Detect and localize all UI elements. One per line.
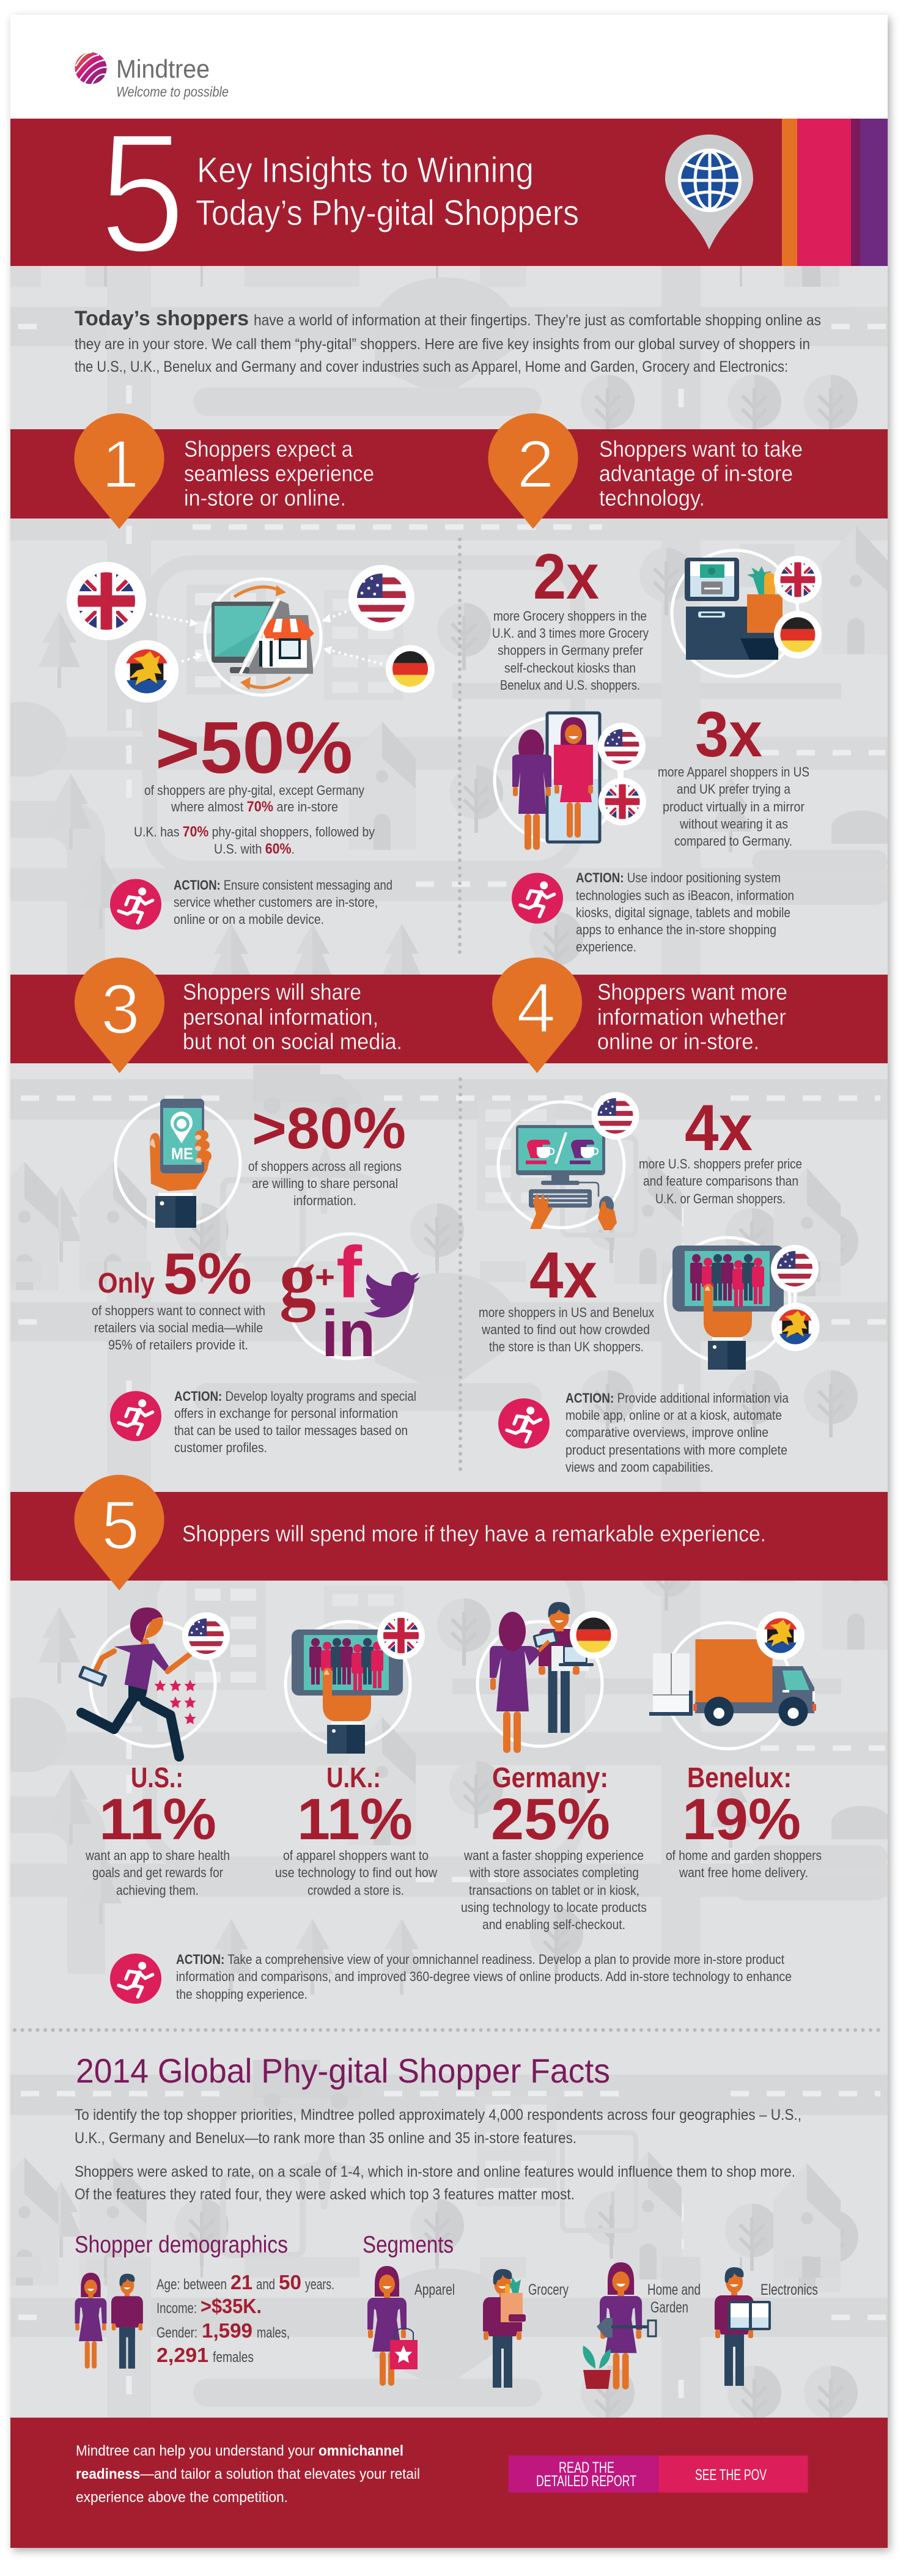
action text 3: that can be used to tailor messages based on	[174, 1423, 408, 1438]
intro paragraph: Today’s shoppers	[75, 307, 249, 330]
text block: apparel shoppers	[658, 764, 809, 849]
column: U.K. stat: crowded a store is.	[308, 1883, 404, 1898]
stat: 2x: 2x	[533, 541, 599, 613]
segment: home and garden	[583, 2262, 701, 2390]
illustration: crowd on tablet	[665, 1238, 819, 1370]
icon: number pin 3: 3	[101, 970, 140, 1049]
text block: grocery shoppers	[492, 608, 649, 693]
action text 2: ACTION: Use indoor positioning system	[576, 870, 781, 885]
icon: number pin 4	[492, 958, 582, 1073]
big number 5: 5	[99, 98, 186, 289]
title: Key Insights to Winning	[197, 150, 534, 190]
segment: grocery	[483, 2269, 569, 2388]
icon: US flag	[598, 723, 646, 770]
text block: demographics: 2,291	[157, 2344, 208, 2366]
icon: action runner 1	[110, 879, 161, 929]
footer text	[76, 2443, 420, 2506]
heading 1: in-store or online.	[184, 485, 346, 511]
column: Germany stat: and enabling self-checkout.	[482, 1917, 625, 1932]
heading 3: Shoppers will share	[183, 980, 361, 1005]
text block: social media: of shoppers want to connect with	[92, 1303, 265, 1318]
action text 4: views and zoom capabilities.	[565, 1460, 713, 1475]
illustration: hand holding phone: ME	[171, 1145, 193, 1163]
text block: sharing information: are willing to share personal	[252, 1176, 398, 1191]
text block: demographics: males,	[257, 2325, 290, 2341]
heading: shopper demographics: Shopper demographics	[75, 2232, 288, 2258]
column: U.K. stat: U.K.:	[326, 1762, 381, 1793]
action text 5	[176, 1952, 792, 2002]
action text 2: apps to enhance the in-store shopping	[576, 922, 776, 937]
illustration: self-checkout kiosk	[672, 550, 822, 676]
text block: demographics: Gender:	[157, 2325, 197, 2341]
icon: US flag	[348, 565, 414, 631]
action text 2: kiosks, digital signage, tablets and mobile	[576, 905, 790, 920]
icon: number pin 2: 2	[517, 427, 554, 502]
icon: social media logos	[279, 1231, 420, 1370]
footer text: experience above the competition.	[76, 2489, 288, 2506]
illustration: running woman	[78, 1607, 230, 1757]
icon: number pin 2	[488, 413, 578, 529]
icon: number pin 5: 5	[101, 1487, 139, 1563]
column: U.S. stat: goals and get rewards for	[92, 1865, 223, 1880]
footer text: Mindtree can help you understand your omnichannel	[76, 2443, 403, 2459]
icon: Germany flag	[386, 645, 435, 693]
action text 5: information and comparisons, and improved 360-degree views of online products. Add in-store technology to enhance	[176, 1969, 792, 1984]
text block: apparel shoppers: without wearing it as	[679, 816, 788, 832]
column: Benelux stat: of home and garden shoppers	[666, 1848, 822, 1863]
action text 4: ACTION: Provide additional information via	[565, 1390, 789, 1406]
text block: demographics: and	[256, 2276, 275, 2293]
column: Germany stat: want a faster shopping experience	[463, 1848, 644, 1863]
icon: globe location pin	[665, 135, 753, 249]
heading 2	[599, 437, 803, 511]
column: U.K. stat	[275, 1762, 437, 1898]
illustration: virtual mirror	[495, 713, 646, 850]
text block: grocery shoppers: more Grocery shoppers in the	[493, 608, 647, 624]
icon: action runner 2	[512, 873, 563, 923]
text block: crowding	[479, 1305, 654, 1354]
action text 3: ACTION: Develop loyalty programs and special	[174, 1389, 416, 1404]
column: U.K. stat: of apparel shoppers want to	[283, 1848, 429, 1863]
illustration: delivery truck	[650, 1612, 816, 1749]
heading: shopper facts: 2014 Global Phy-gital Shopper Facts	[76, 2051, 610, 2090]
panel: white logo header	[10, 15, 888, 119]
action text 3: customer profiles.	[174, 1440, 267, 1455]
illustration: U.K. crowd on tablet	[285, 1612, 425, 1754]
text block: methodology: To identify the top shopper priorities, Mindtree polled approximately 4,000 respondents across four geographies – U.S.,	[75, 2106, 801, 2124]
intro paragraph: they are in your store. We call them “phy-gital” shoppers. Here are five key insights from our global survey of shoppers in	[75, 336, 810, 353]
stat: 4x crowding: 4x	[529, 1238, 597, 1312]
column: Germany stat: with store associates completing	[469, 1865, 639, 1880]
column: Benelux stat: Benelux:	[687, 1762, 792, 1793]
text block: phy-gital shoppers: where almost 70% are in-store	[171, 799, 338, 815]
segment: grocery: Grocery	[528, 2281, 569, 2298]
text block: grocery shoppers: Benelux and U.S. shoppers.	[500, 677, 640, 693]
heading 2: technology.	[599, 485, 705, 511]
text block: methodology: U.K., Germany and Benelux—to rank more than 35 online and 35 in-store features.	[75, 2130, 576, 2147]
column: U.S. stat: U.S.:	[131, 1762, 183, 1793]
intro paragraph: have a world of information at their fingertips. They’re just as comfortable shopping online as	[254, 312, 821, 329]
column: Germany stat: Germany:	[492, 1762, 608, 1793]
icon: number pin 3	[75, 958, 164, 1073]
illustration: hand holding phone	[116, 1099, 240, 1228]
heading 2: Shoppers want to take	[599, 437, 803, 462]
icon: US flag	[182, 1612, 230, 1660]
text block: comparisons: more U.S. shoppers prefer price	[639, 1156, 802, 1172]
text block: grocery shoppers: self-checkout kiosks than	[504, 660, 636, 676]
text block: crowding: the store is than UK shoppers.	[489, 1339, 644, 1354]
arrows: circular orange	[234, 585, 290, 690]
action text 2: experience.	[576, 939, 636, 954]
icon: US flag	[771, 1245, 819, 1293]
text block: phy-gital shoppers: of shoppers are phy-gital, except Germany	[144, 783, 364, 798]
text block: comparisons: and feature comparisons than	[643, 1173, 798, 1189]
panel: insight banner 3 and 4	[10, 958, 888, 1073]
stat: over 80 percent: >80%	[252, 1096, 406, 1161]
text block: phy-gital shoppers: U.S. with 60%.	[214, 841, 295, 857]
text block: demographics: 21	[230, 2271, 252, 2294]
icon: UK flag	[67, 562, 146, 640]
icon: demographic woman	[75, 2273, 106, 2369]
text block: demographics: 1,599	[202, 2319, 252, 2342]
action text 1	[174, 877, 392, 927]
icon: number pin 1: 1	[101, 427, 139, 502]
heading 4: online or in-store.	[597, 1029, 759, 1054]
icon: social media logos: in	[322, 1296, 375, 1370]
text block: methodology: Of the features they rated four, they were asked which top 3 features matter most.	[75, 2186, 575, 2203]
button: read the detailed report: READ THE	[559, 2459, 614, 2476]
column: U.K. stat: use technology to find out how	[275, 1865, 437, 1880]
intro paragraph: the U.S., U.K., Benelux and Germany and cover industries such as Apparel, Home and Garden, Grocery and Electronics:	[75, 358, 788, 375]
column: Benelux stat: 19%	[682, 1787, 801, 1852]
text block: social media: 95% of retailers provide it.	[108, 1337, 248, 1353]
column: U.S. stat: 11%	[99, 1787, 216, 1852]
icon: number pin 4: 4	[517, 969, 556, 1047]
text block: grocery shoppers: shoppers in Germany prefer	[498, 643, 643, 658]
heading 5: Shoppers will spend more if they have a remarkable experience.	[182, 1521, 766, 1546]
heading 4	[597, 980, 787, 1054]
column: Germany stat: using technology to locate products	[461, 1900, 647, 1915]
text block: apparel shoppers: and UK prefer trying a	[677, 781, 791, 797]
illustration: desktop comparison	[498, 1092, 639, 1230]
icon: social media logos: +	[315, 1260, 335, 1295]
stat: 4x comparisons: 4x	[685, 1091, 753, 1164]
text block: apparel shoppers: compared to Germany.	[674, 833, 792, 849]
footer text: readiness—and tailor a solution that elevates your retail	[76, 2466, 420, 2482]
icon: UK flag	[598, 778, 646, 825]
segment: apparel: Apparel	[414, 2281, 455, 2298]
text block: phy-gital shoppers	[134, 783, 375, 857]
icon: social media logos: g	[279, 1234, 316, 1323]
segment: electronics	[715, 2267, 818, 2386]
text block: demographics: Income:	[157, 2300, 197, 2317]
column: Germany stat: 25%	[491, 1787, 610, 1852]
icon: UK flag	[774, 556, 822, 603]
panel: title banner	[10, 98, 888, 289]
text block: methodology	[75, 2106, 801, 2203]
arrows: dotted connectors	[150, 611, 382, 664]
icon: demographic man	[111, 2274, 143, 2369]
text block: grocery shoppers: U.K. and 3 times more Grocery	[492, 626, 649, 641]
text block: sharing information	[248, 1159, 402, 1208]
icon: Benelux flag	[756, 1612, 805, 1659]
icon: Germany flag	[774, 611, 822, 659]
stat: only 5 percent: 5%	[163, 1241, 252, 1307]
heading 3: but not on social media.	[183, 1029, 402, 1054]
text block: demographics: years.	[305, 2276, 334, 2293]
column: U.S. stat: want an app to share health	[85, 1848, 230, 1863]
text block: apparel shoppers: more Apparel shoppers in US	[658, 764, 809, 780]
action text 3	[174, 1389, 416, 1455]
text block: sharing information: information.	[293, 1193, 356, 1208]
tagline: Welcome to possible	[116, 84, 229, 100]
action text 4: comparative overviews, improve online	[565, 1425, 768, 1440]
icon: Benelux flag	[115, 640, 179, 703]
text block: crowding: more shoppers in US and Benelux	[479, 1305, 654, 1320]
segment: home and garden: Garden	[650, 2299, 688, 2316]
icon: Benelux flag	[772, 1302, 819, 1351]
column: Benelux stat	[666, 1762, 822, 1880]
button: read the detailed report	[509, 2456, 659, 2492]
action text 4	[565, 1390, 789, 1475]
icon: Germany flag	[570, 1611, 617, 1659]
icon: Mindtree logo mark	[75, 53, 107, 84]
text block: social media: retailers via social media—while	[94, 1320, 263, 1335]
stat: only 5 percent: Only	[98, 1267, 155, 1299]
stat: over 50 percent: >50%	[155, 707, 353, 789]
text block: crowding: wanted to find out how crowded	[481, 1322, 650, 1337]
heading 4: Shoppers want more	[597, 980, 787, 1005]
title	[196, 150, 579, 233]
panel: insight banner 5	[10, 1475, 888, 1590]
panel: footer call to action	[10, 2418, 888, 2548]
illustration: Germany store associate	[477, 1602, 617, 1753]
column: Benelux stat: want free home delivery.	[679, 1865, 808, 1880]
text block: demographics	[157, 2271, 334, 2366]
text block: social media	[92, 1303, 265, 1353]
heading 1: Shoppers expect a	[184, 437, 353, 462]
icon: action runner 4	[498, 1398, 550, 1449]
text block: demographics: Age: between	[157, 2276, 227, 2293]
heading: segments: Segments	[363, 2232, 454, 2258]
button: read the detailed report: DETAILED REPORT	[536, 2473, 636, 2490]
column: U.K. stat: 11%	[297, 1787, 413, 1852]
action text 3: offers in exchange for personal information	[174, 1406, 398, 1421]
segment: electronics: Electronics	[760, 2281, 818, 2298]
heading 1	[184, 437, 374, 511]
text block: sharing information: of shoppers across all regions	[248, 1159, 402, 1174]
heading 2: advantage of in-store	[599, 461, 793, 486]
text block: comparisons	[639, 1156, 802, 1206]
segment: home and garden: Home and	[647, 2281, 701, 2298]
column: U.S. stat	[85, 1762, 230, 1898]
column: U.S. stat: achieving them.	[116, 1883, 199, 1898]
text block: phy-gital shoppers: U.K. has 70% phy-gital shoppers, followed by	[134, 824, 375, 840]
action text 1: ACTION: Ensure consistent messaging and	[174, 877, 392, 893]
icon: action runner 3	[110, 1391, 161, 1441]
icon: UK flag	[377, 1612, 425, 1659]
action text 5: the shopping experience.	[176, 1987, 308, 2002]
text block: demographics: 50	[279, 2271, 301, 2294]
icon: social media logos: f	[336, 1231, 363, 1313]
column: Germany stat	[461, 1762, 647, 1932]
text block: comparisons: U.K. or German shoppers.	[655, 1191, 786, 1206]
button: see the pov: SEE THE POV	[695, 2467, 767, 2484]
stat: 3x: 3x	[695, 699, 762, 770]
icon: number pin 5	[75, 1475, 164, 1590]
intro paragraph	[75, 307, 821, 375]
title: Today’s Phy-gital Shoppers	[196, 193, 579, 233]
action text 2	[576, 870, 794, 954]
icon: action runner 5	[110, 1954, 161, 2004]
heading 4: information whether	[597, 1005, 786, 1030]
brand name: Mindtree	[116, 54, 210, 83]
button: see the pov	[659, 2456, 808, 2492]
text block: methodology: Shoppers were asked to rate, on a scale of 1-4, which in-store and online features would influence them to shop more.	[75, 2163, 795, 2180]
illustration: omnichannel store with flags	[67, 562, 435, 703]
icon: US flag	[592, 1092, 639, 1140]
icon: monitor and storefront	[212, 599, 314, 674]
column: Germany stat: transactions on tablet or in kiosk,	[469, 1883, 639, 1898]
action text 4: product presentations with more complete	[565, 1442, 787, 1458]
action text 2: technologies such as iBeacon, information	[576, 888, 794, 903]
action text 1: online or on a mobile device.	[174, 912, 324, 927]
heading 3	[183, 980, 402, 1054]
text block: apparel shoppers: product virtually in a mirror	[663, 799, 805, 814]
action text 1: service whether customers are in-store,	[174, 895, 378, 910]
stat: only 5 percent	[98, 1241, 252, 1307]
action text 5: ACTION: Take a comprehensive view of your omnichannel readiness. Develop a plan to provide more in-store product	[176, 1952, 784, 1967]
icon: number pin 1	[75, 413, 164, 529]
text block: demographics: females	[213, 2349, 254, 2366]
heading 3: personal information,	[183, 1005, 378, 1030]
text block: demographics: >$35K.	[201, 2295, 262, 2317]
segment: apparel	[367, 2266, 455, 2386]
heading 1: seamless experience	[184, 461, 374, 486]
panel: insight banner 1 and 2	[10, 413, 888, 529]
action text 4: mobile app, online or at a kiosk, automate	[565, 1408, 782, 1423]
